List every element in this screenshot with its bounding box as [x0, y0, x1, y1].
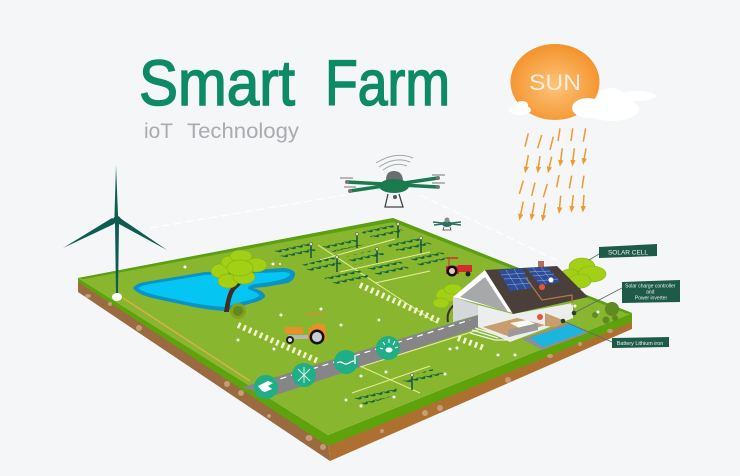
gable — [453, 270, 513, 313]
crop plots — [274, 225, 451, 405]
label: charge controller — [622, 280, 680, 303]
swimming pool — [522, 323, 590, 350]
sun rays arrows — [519, 128, 586, 218]
scattered white dots — [184, 262, 600, 408]
chimney — [538, 261, 544, 268]
sun with clouds — [509, 44, 656, 121]
icon: fan — [292, 363, 316, 387]
roof — [485, 266, 588, 314]
wifi signal arcs — [376, 155, 413, 170]
bushes right corner — [592, 302, 619, 324]
subtitle: ioT — [144, 120, 173, 143]
room floor — [483, 318, 545, 337]
drone landing frame — [385, 194, 403, 207]
solar panel left — [498, 268, 534, 291]
grass top — [78, 218, 632, 435]
tree beside the house — [433, 284, 462, 322]
drone dome — [386, 171, 403, 180]
controller dots — [539, 284, 545, 290]
red tractor — [446, 258, 472, 276]
title: Smart — [139, 47, 295, 119]
soil left side — [78, 278, 330, 461]
zebra paths — [238, 285, 484, 362]
sun with clouds: SUN — [529, 70, 581, 95]
title: Farm — [325, 47, 450, 119]
label: charge controller: Power inverter — [635, 296, 667, 302]
subtitle — [144, 120, 300, 143]
soil pebbles — [85, 294, 613, 450]
wind turbine — [63, 165, 167, 301]
title — [139, 47, 450, 119]
main drone — [340, 155, 445, 207]
drone arms — [347, 178, 438, 191]
house with solar panels — [453, 261, 588, 342]
farm land block — [78, 218, 632, 461]
label leader lines — [563, 254, 622, 342]
pond — [133, 268, 295, 311]
right room wood — [545, 313, 563, 327]
subtitle: Technology — [187, 120, 300, 143]
label: solar cell: SOLAR CELL — [608, 250, 648, 256]
icon: light — [376, 336, 400, 360]
garage wall — [453, 297, 478, 322]
label: battery — [612, 337, 669, 348]
icon: water level — [334, 350, 358, 374]
icon: leaf — [254, 375, 278, 399]
label: solar cell — [599, 244, 657, 258]
tree by the pond — [211, 250, 267, 319]
house back walls — [478, 303, 573, 342]
field lines — [318, 239, 435, 393]
drone body — [379, 179, 409, 193]
bed — [510, 320, 538, 330]
tree behind the house — [561, 258, 606, 292]
grass side edge — [78, 278, 632, 446]
signal lines — [150, 195, 560, 262]
soil right side — [328, 315, 632, 461]
label: charge controller: Solar charge controller — [625, 284, 676, 290]
road — [243, 315, 478, 397]
steps — [470, 328, 510, 340]
sensor icons on road — [254, 336, 400, 399]
sprinklers — [310, 222, 422, 390]
label: charge controller: and — [646, 290, 655, 296]
yellow edge path — [123, 298, 250, 381]
small drone — [433, 218, 461, 230]
leader end dots — [561, 311, 576, 323]
solar panel right — [526, 267, 561, 285]
orange tractor — [285, 314, 327, 344]
label: battery: Battery Lithium iron — [617, 341, 663, 347]
wiring — [526, 278, 572, 305]
rotors — [340, 175, 445, 187]
